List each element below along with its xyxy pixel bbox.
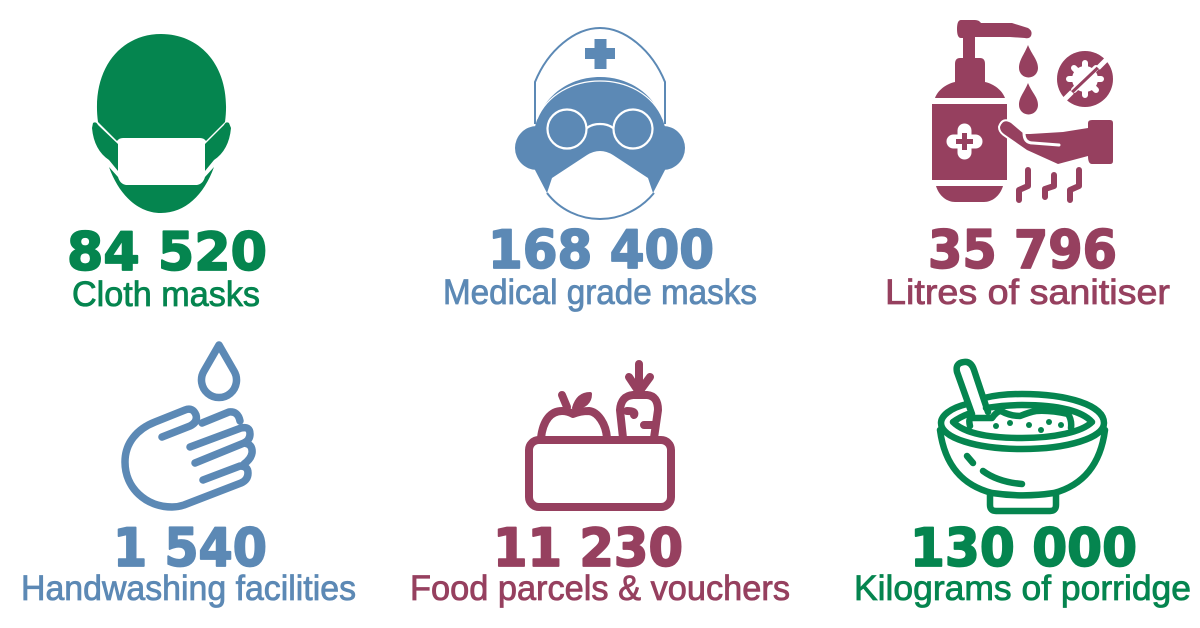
panel: handwashing facilities: [21, 345, 356, 608]
label: Cloth masks: Cloth masks: [72, 275, 260, 314]
panel: kilograms of porridge: [854, 362, 1191, 608]
figure: 168 400: 168 400: [488, 220, 714, 281]
icon: hand and water drop: [125, 345, 252, 507]
icon: sanitiser bottle, hand and virus: [932, 20, 1113, 202]
label: Kilograms of porridge: Kilograms of porridge: [854, 569, 1191, 608]
icon: face with cloth mask: [92, 34, 231, 213]
figure: 84 520: 84 520: [67, 222, 267, 283]
panel: food parcels and vouchers: [410, 364, 790, 608]
panel: medical grade masks: [443, 28, 757, 312]
panel: litres of sanitiser: [885, 20, 1170, 312]
figure: 11 230: 11 230: [493, 518, 683, 579]
panel: cloth masks: [67, 34, 267, 314]
figure: 35 796: 35 796: [928, 220, 1117, 281]
label: Medical grade masks: Medical grade masks: [443, 273, 757, 312]
label: Handwashing facilities: Handwashing facilities: [21, 569, 356, 608]
label: Food parcels & vouchers: Food parcels & vouchers: [410, 569, 790, 608]
icon: box with apple and carrot: [529, 364, 671, 507]
icon: bowl of porridge with spoon: [940, 362, 1105, 511]
label: Litres of sanitiser: Litres of sanitiser: [885, 273, 1170, 312]
icon: medic with cap and glasses: [515, 28, 685, 219]
figure: 130 000: 130 000: [910, 518, 1137, 579]
figure: 1 540: 1 540: [113, 518, 267, 579]
